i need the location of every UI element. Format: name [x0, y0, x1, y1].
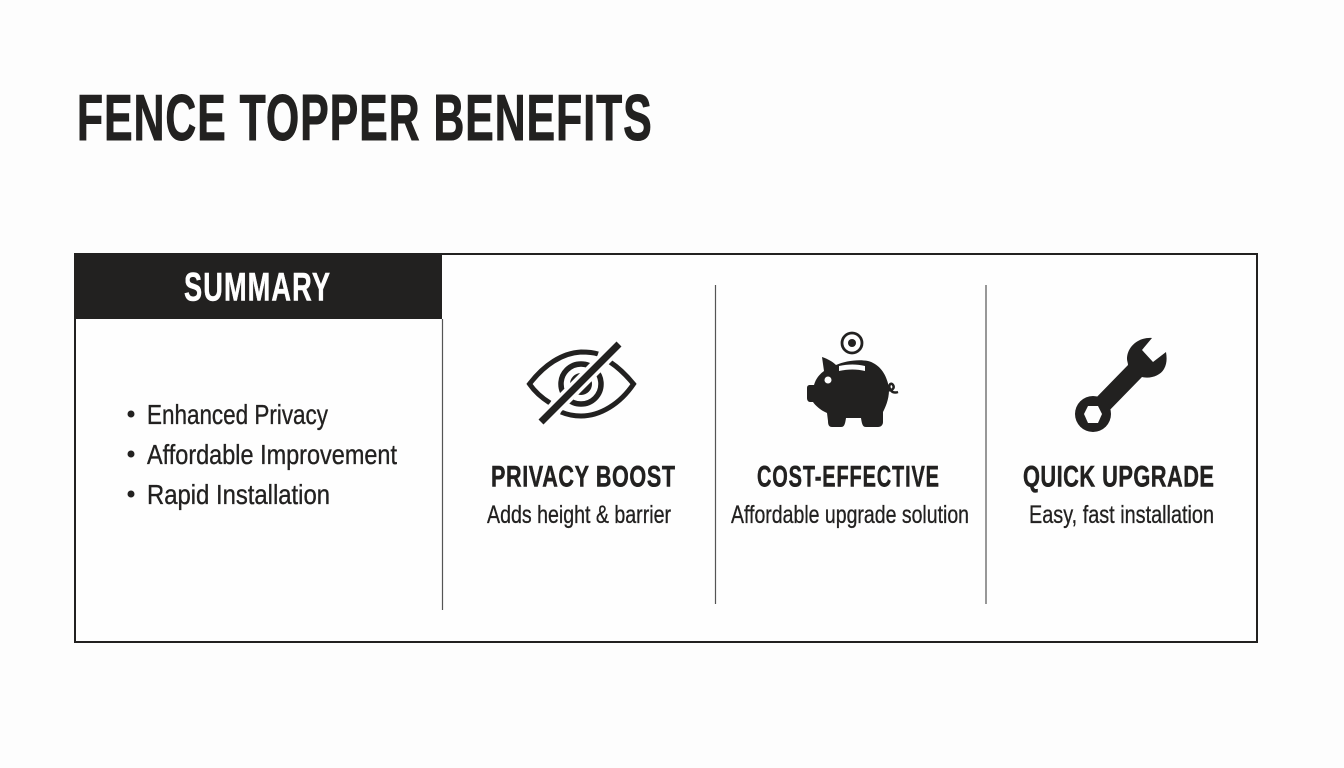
- heading: PRIVACY BOOST: [491, 459, 675, 493]
- panel: quick upgrade: [1023, 338, 1214, 529]
- summary list: [128, 399, 397, 510]
- summary list: Enhanced Privacy: [147, 399, 328, 430]
- summary list: Rapid Installation: [147, 479, 330, 510]
- panel: cost-effective: [731, 333, 969, 529]
- title: FENCE TOPPER BENEFITS: [77, 81, 652, 154]
- heading: QUICK UPGRADE: [1023, 459, 1214, 493]
- panel: privacy boost: [487, 344, 675, 529]
- icon: crossed-out eye: [530, 344, 634, 422]
- heading: COST-EFFECTIVE: [757, 461, 939, 494]
- description: Adds height & barrier: [487, 501, 671, 529]
- description: Easy, fast installation: [1029, 501, 1214, 529]
- icon: wrench: [1075, 338, 1167, 432]
- summary list: Affordable Improvement: [147, 439, 397, 470]
- summary heading: SUMMARY: [184, 265, 330, 310]
- icon: piggy bank with coin: [807, 333, 898, 427]
- summary header bar: [75, 254, 442, 319]
- main panel: [75, 254, 1257, 642]
- panel: summary: [75, 254, 442, 510]
- description: Affordable upgrade solution: [731, 501, 969, 529]
